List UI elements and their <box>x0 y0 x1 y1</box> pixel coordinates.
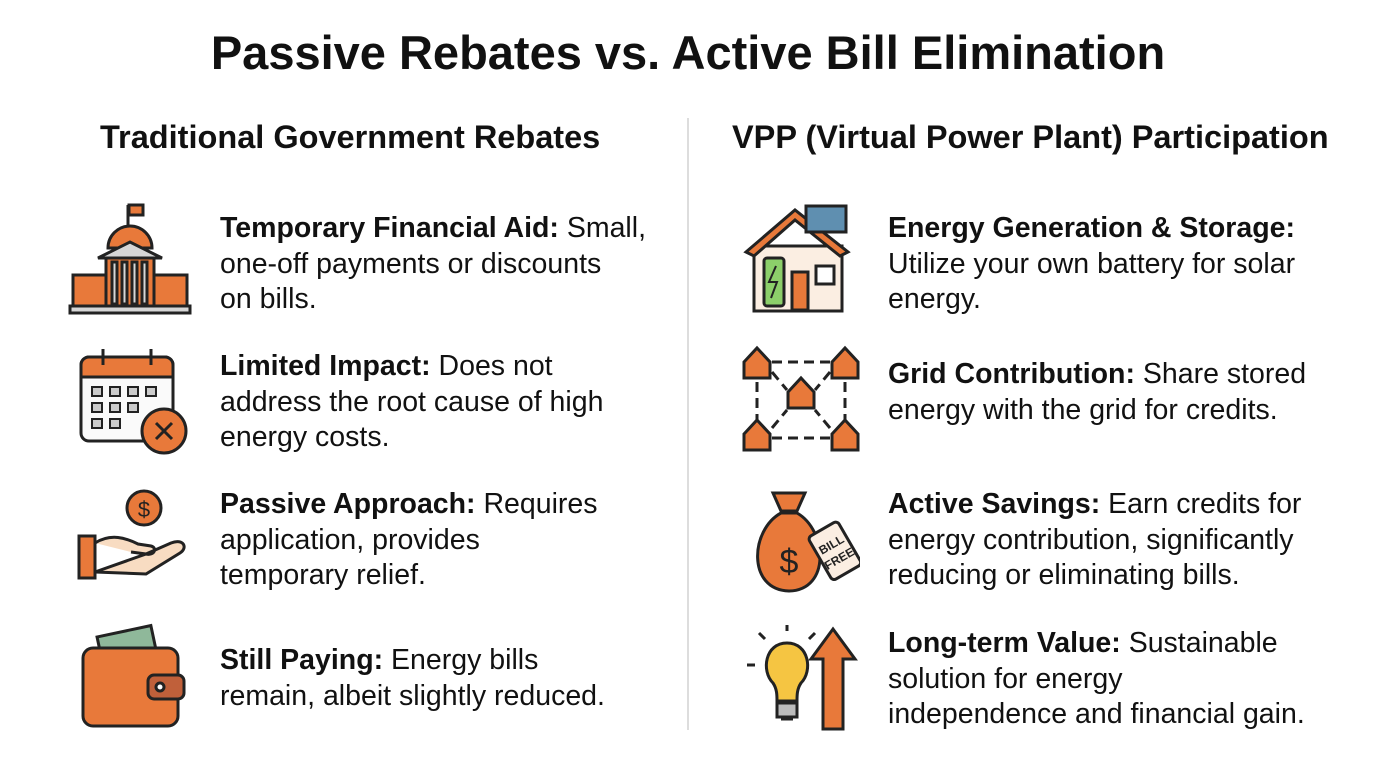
text: passive approach: Passive Approach: Requires <box>220 488 598 520</box>
text: temporary financial aid: Temporary Financial Aid: Small, <box>220 212 646 244</box>
text: temporary financial aid: on bills. <box>220 283 317 315</box>
text: energy generation: Energy Generation & Storage: <box>888 212 1295 244</box>
icon: hand with coin: $ <box>138 497 150 522</box>
icon: money bag with tag: $ <box>780 543 799 581</box>
text: energy generation: Utilize your own battery for solar <box>888 248 1295 280</box>
text: still paying: remain, albeit slightly reduced. <box>220 680 605 712</box>
title: Passive Rebates vs. Active Bill Elimination <box>211 26 1165 79</box>
text: long-term value: Long-term Value: Sustainable <box>888 627 1278 659</box>
text: energy generation: energy. <box>888 283 981 315</box>
text: long-term value: independence and financial gain. <box>888 698 1305 730</box>
text: limited impact: address the root cause of high <box>220 386 603 418</box>
icon: money bag with tag <box>756 492 860 592</box>
text: long-term value: solution for energy <box>888 662 1122 694</box>
text: grid contribution: Grid Contribution: Share stored <box>888 358 1306 390</box>
text: passive approach: application, provides <box>220 524 480 556</box>
text: active savings: Active Savings: Earn credits for <box>888 488 1301 520</box>
icon: money bag with tag: FREE <box>822 545 857 573</box>
right heading: VPP (Virtual Power Plant) Participation <box>732 119 1329 155</box>
left heading: Traditional Government Rebates <box>100 119 600 155</box>
text: active savings: reducing or eliminating bills. <box>888 559 1240 591</box>
icon: bulb and arrow <box>747 625 858 730</box>
icon: money bag with tag: BILL <box>816 532 846 557</box>
text: long-term value <box>888 627 1305 730</box>
text: still paying: Still Paying: Energy bills <box>220 644 538 676</box>
text: grid contribution: energy with the grid for credits. <box>888 394 1278 426</box>
text: limited impact: Limited Impact: Does not <box>220 350 553 382</box>
icon: calendar with x <box>80 349 188 454</box>
text: temporary financial aid: one-off payments or discounts <box>220 248 601 280</box>
text: active savings <box>888 488 1301 591</box>
text: active savings: energy contribution, significantly <box>888 524 1294 556</box>
text: limited impact <box>220 350 603 453</box>
text: still paying <box>220 644 605 712</box>
text: grid contribution <box>888 358 1306 426</box>
icon: wallet <box>82 624 186 728</box>
icon: solar house <box>743 204 851 312</box>
icon: house network <box>742 346 860 452</box>
text: energy generation <box>888 212 1295 315</box>
icon: hand with coin <box>78 490 186 580</box>
text: temporary financial aid <box>220 212 646 315</box>
icon: government building <box>68 204 192 314</box>
text: passive approach <box>220 488 598 591</box>
text: passive approach: temporary relief. <box>220 559 426 591</box>
text: limited impact: energy costs. <box>220 421 390 453</box>
